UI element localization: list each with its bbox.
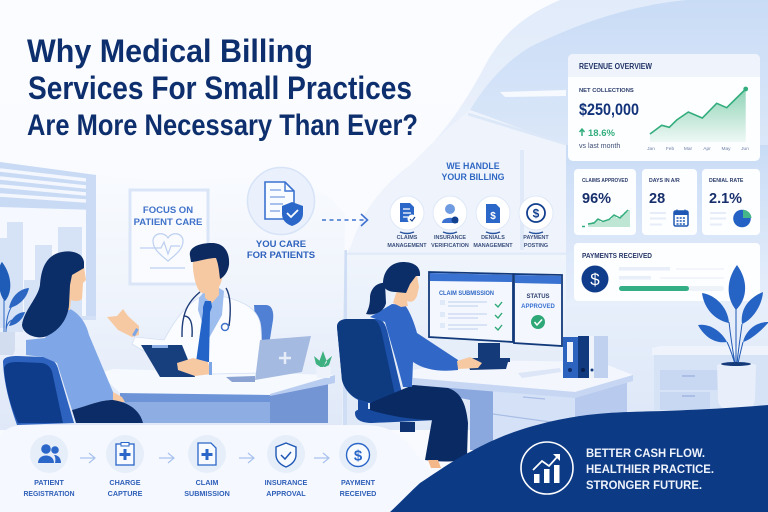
card: denial rate: DENIAL RATE: [709, 178, 744, 184]
monitor: status approved: [514, 274, 562, 346]
callout label: FOR PATIENTS: [247, 250, 315, 261]
small green plant: [314, 351, 332, 378]
service: denials management: [473, 196, 513, 249]
wall poster: focus on patient care: [130, 190, 208, 284]
card: claims approved: 96%: [582, 191, 611, 207]
icon: large potted plant: [698, 265, 768, 410]
laptop: [226, 336, 311, 382]
window with blinds and city: [0, 162, 96, 332]
trousers: [370, 385, 468, 462]
net collections figures: NET COLLECTIONS: [579, 88, 634, 94]
poster heading: [134, 205, 202, 228]
ponytail: [366, 283, 386, 315]
monitor: claim submission: CLAIM SUBMISSION: [439, 290, 494, 297]
doctor chair: [254, 305, 273, 345]
icon: calendar: [674, 210, 688, 226]
icon: pie chart: [733, 210, 752, 227]
card: claims approved: CLAIMS APPROVED: [582, 178, 628, 184]
banner slogan: STRONGER FUTURE.: [586, 478, 702, 492]
step: charge capture: CHARGE: [109, 478, 141, 487]
net collections figures: vs last month: [579, 143, 620, 150]
card: days in A/R: DAYS IN A/R: [649, 178, 680, 184]
clipboard: [141, 345, 195, 377]
background: inner blue wave and office room: [470, 0, 768, 252]
line chart: net collections: May: [721, 146, 731, 152]
patient chair: [3, 356, 74, 425]
service: claims management: CLAIMS: [397, 235, 418, 241]
service: claims management: MANAGEMENT: [387, 243, 427, 249]
card: days in A/R: 28: [649, 191, 665, 207]
step: charge capture: [106, 435, 144, 498]
step: payment received: [339, 435, 377, 498]
shirt and neck: [198, 288, 224, 340]
step: patient registration: REGISTRATION: [24, 489, 74, 498]
poster heading: PATIENT CARE: [134, 217, 202, 228]
title: Why Medical Billing: [27, 33, 313, 69]
service: denials management: MANAGEMENT: [473, 243, 513, 249]
tie: [196, 301, 212, 362]
step: payment received: PAYMENT: [341, 478, 376, 487]
step: payment received: $: [354, 448, 363, 464]
title: [27, 33, 418, 142]
service: insurance verification: [431, 196, 469, 249]
card: denial rate: [702, 169, 760, 235]
card: days in A/R: [642, 169, 697, 235]
service: denials management: DENIALS: [481, 235, 505, 241]
figure: doctor: [107, 243, 262, 377]
keyboard: [467, 362, 508, 370]
title: Are More Necessary Than Ever?: [27, 109, 418, 142]
monitor: status approved: APPROVED: [521, 304, 555, 310]
hand on keyboard: [457, 357, 482, 369]
line chart: net collections: Jun: [741, 146, 749, 152]
step: claim submission: SUBMISSION: [184, 489, 230, 498]
patient face: [66, 265, 86, 310]
patient trousers: [72, 400, 143, 423]
step: claim submission: [184, 435, 230, 498]
gesturing hand: [107, 309, 139, 337]
line chart: net collections: Mar: [684, 146, 693, 152]
figure: seated patient: [3, 251, 143, 425]
heading: we handle your billing: YOUR BILLING: [441, 172, 505, 182]
step: patient registration: PATIENT: [34, 478, 64, 487]
icon: growth chart: [521, 442, 573, 494]
hand on clipboard: [177, 358, 211, 376]
net collections figures: [579, 88, 639, 150]
left wall swoosh: [0, 163, 345, 430]
card: claims approved: [574, 169, 636, 235]
background: office ceiling and back wall: [343, 90, 768, 430]
monitor stand: [470, 343, 510, 362]
service: claims management: [387, 196, 427, 249]
background: outer light blue wave: [340, 0, 768, 430]
torso and arm: [370, 304, 458, 387]
card: payments received: [574, 243, 760, 301]
net collections figures: 18.6%: [588, 128, 615, 139]
step: patient registration: [24, 435, 74, 498]
service: insurance verification: INSURANCE: [434, 235, 466, 241]
monitor: status approved: STATUS: [526, 294, 550, 300]
arrow: step one to two: [80, 453, 95, 463]
heading: we handle your billing: WE HANDLE: [446, 161, 500, 171]
office chair: [337, 319, 442, 432]
icon: dollar badge: $: [590, 270, 600, 289]
binders: [563, 336, 608, 378]
stethoscope: [182, 288, 230, 337]
panel: revenue cycle steps: [0, 425, 431, 512]
ankle: [428, 460, 441, 468]
hair: [190, 243, 229, 279]
arrow: step three to four: [239, 453, 254, 463]
card: payments received: PAYMENTS RECEIVED: [582, 251, 652, 260]
service: payment posting: $: [533, 206, 540, 220]
neck and face: [393, 275, 419, 307]
figure: billing specialist: [337, 262, 482, 468]
callout label: YOU CARE: [256, 239, 306, 250]
service: payment posting: PAYMENT: [523, 235, 549, 241]
step: insurance approval: INSURANCE: [265, 478, 308, 487]
step: charge capture: CAPTURE: [108, 489, 143, 498]
icon: heart with pulse: [140, 234, 185, 268]
hair: [383, 262, 420, 293]
title: Services For Small Practices: [28, 70, 412, 106]
arrow: step two to three: [159, 453, 174, 463]
line chart: net collections: Feb: [666, 146, 674, 152]
service: payment posting: [519, 196, 553, 249]
sparkline: [582, 210, 630, 227]
desk: billing workstation: [413, 360, 633, 450]
step: insurance approval: APPROVAL: [266, 489, 306, 498]
icon: dollar badge: [582, 266, 608, 292]
patient hair: [22, 251, 84, 337]
card: denial rate: 2.1%: [709, 191, 742, 207]
icon: left potted plant: [0, 262, 29, 355]
desk: consultation: [99, 369, 335, 423]
callout label: [247, 239, 315, 261]
lab coat: [132, 297, 262, 374]
right cabinet: [652, 346, 768, 410]
poster heading: FOCUS ON: [143, 205, 193, 216]
callout: you care for patients: [247, 168, 315, 261]
service: denials management: $: [490, 211, 496, 222]
step: payment received: RECEIVED: [340, 489, 376, 498]
progress bars: [619, 267, 724, 291]
heading: we handle your billing: [441, 161, 505, 182]
banner slogan: HEALTHIER PRACTICE.: [586, 462, 714, 476]
arrow: step four to five: [314, 453, 329, 463]
patient body: [26, 308, 113, 410]
banner slogan: [586, 446, 714, 492]
panel: revenue overview: [568, 54, 760, 161]
step: claim submission: CLAIM: [196, 478, 218, 487]
arrow: dashed to billing: [322, 214, 368, 226]
step: insurance approval: [265, 435, 308, 498]
line chart: net collections: Apr: [703, 146, 711, 152]
dual monitors: [429, 272, 562, 370]
banner slogan: BETTER CASH FLOW.: [586, 446, 705, 460]
icon: document with shield: [248, 168, 314, 234]
panel heading: REVENUE OVERVIEW: [579, 62, 652, 71]
net collections figures: $250,000: [579, 101, 639, 119]
patient hand: [113, 392, 125, 402]
panel: cash flow banner: [390, 405, 768, 512]
face: [193, 258, 223, 294]
service: insurance verification: VERIFICATION: [431, 243, 469, 249]
line chart: net collections: Jan: [647, 146, 655, 152]
service: payment posting: POSTING: [524, 243, 548, 249]
line chart: net collections: [647, 87, 749, 152]
